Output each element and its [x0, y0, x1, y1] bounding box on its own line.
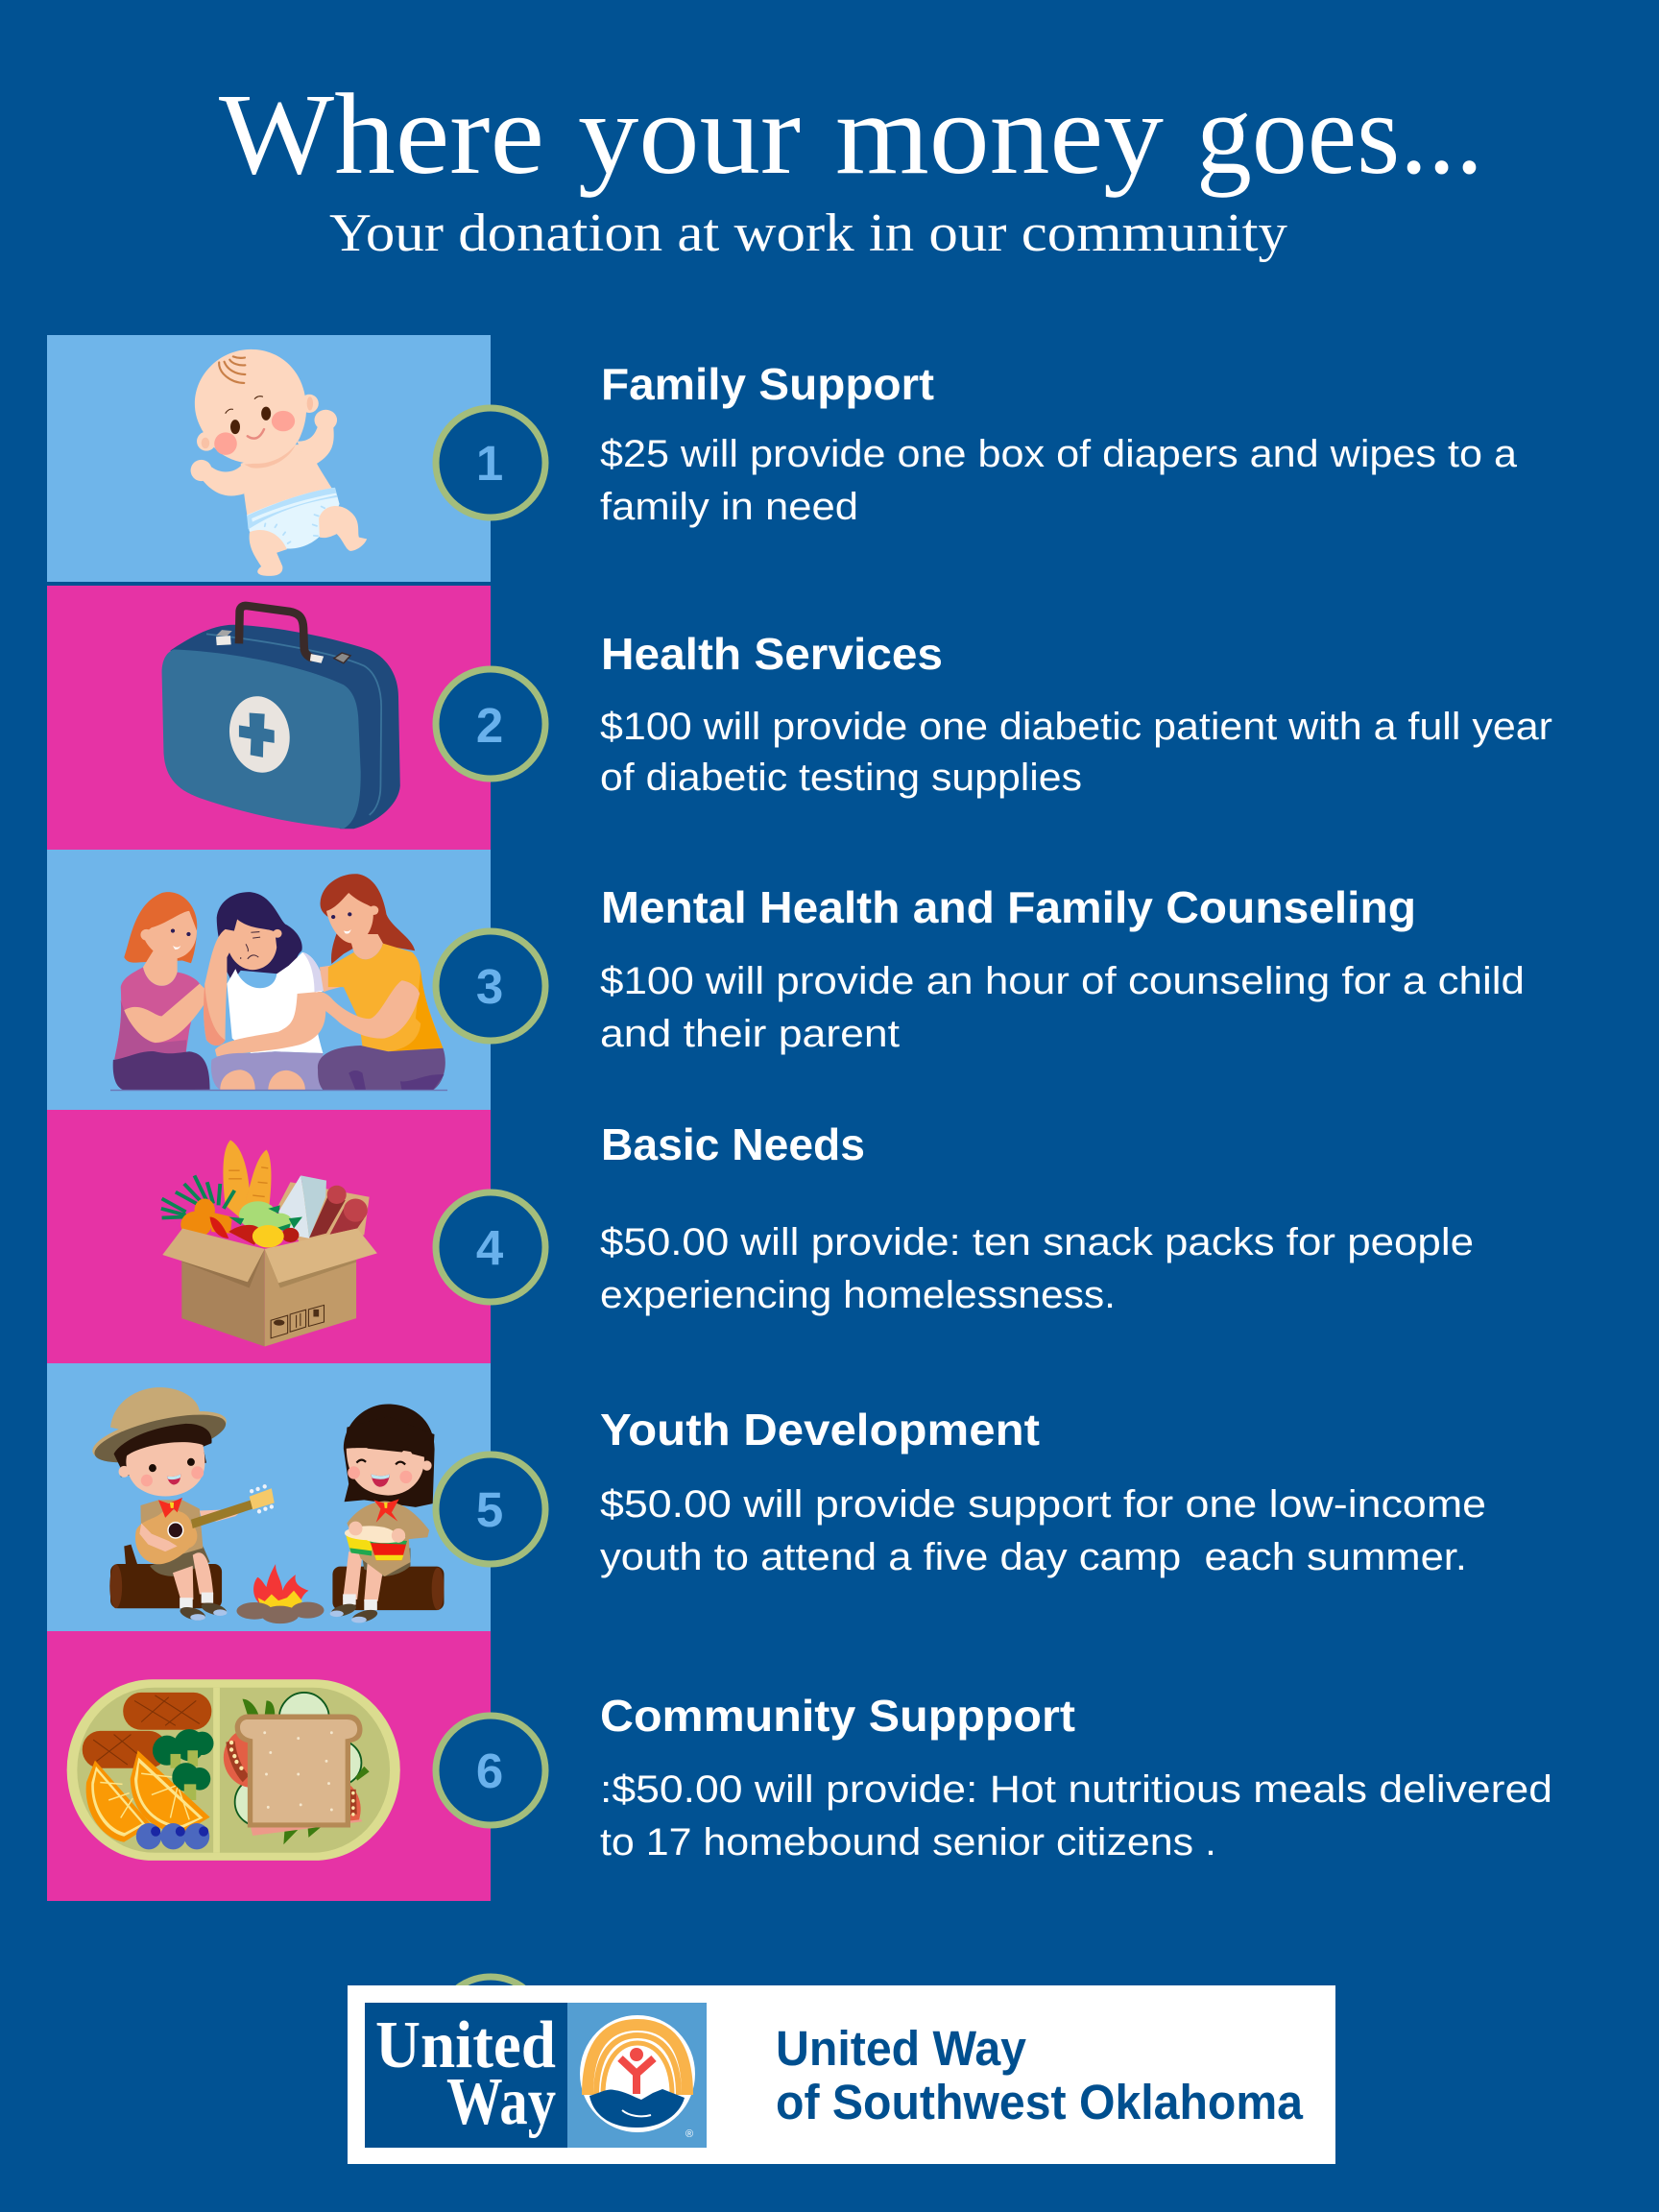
text block: mental health and family counseling: and their parent — [600, 1013, 900, 1055]
organisation name: United Way — [776, 2021, 1027, 2076]
text block: youth development: Youth Development — [600, 1405, 1040, 1455]
text block: health services: of diabetic testing supplies — [600, 757, 1082, 799]
panel: family support image — [47, 335, 491, 582]
number badge 3: 3 — [476, 959, 503, 1014]
number badge 6: 6 — [476, 1743, 503, 1798]
subtitle: Your donation at work in our community — [329, 204, 1287, 263]
number badge 4: 4 — [476, 1220, 504, 1275]
number badge 4 — [436, 1192, 545, 1302]
icon: baby — [191, 349, 367, 576]
number badge 2 — [436, 669, 545, 779]
text block: community support: Community Suppport — [600, 1691, 1075, 1741]
text block: family support: Family Support — [601, 359, 934, 409]
number badge 1: 1 — [476, 436, 503, 491]
panel: health services image — [47, 586, 491, 850]
icon: scouts at campfire — [88, 1387, 444, 1624]
title: Where — [219, 70, 544, 199]
text block: basic needs: experiencing homelessness. — [600, 1274, 1116, 1316]
logo square — [365, 2003, 707, 2148]
panel: counseling image — [47, 850, 491, 1110]
title — [219, 70, 1483, 199]
logo banner: United Way of Southwest Oklahoma — [348, 1985, 1335, 2164]
icon: first aid kit — [162, 606, 400, 829]
text block: youth development — [600, 1405, 1486, 1578]
title: your — [578, 70, 801, 199]
icon: lunch tray — [67, 1679, 400, 1861]
text block: basic needs: $50.00 will provide: ten snack packs for people — [600, 1221, 1474, 1263]
title: money — [835, 70, 1165, 199]
number badge 5 — [436, 1455, 545, 1564]
panel: community support image — [47, 1631, 491, 1901]
logo square: Way — [446, 2065, 556, 2139]
text block: mental health and family counseling: $100 will provide an hour of counseling for a child — [600, 960, 1525, 1002]
number badge 1 — [436, 408, 545, 517]
text block: health services — [600, 629, 1552, 799]
logo square: United — [375, 2008, 556, 2082]
organisation name: of Southwest Oklahoma — [776, 2075, 1304, 2129]
text block: family support: family in need — [600, 486, 858, 528]
text block: family support: $25 will provide one box of diapers and wipes to a — [600, 433, 1518, 475]
panel: basic needs image — [47, 1110, 491, 1363]
panel: youth development image — [47, 1363, 491, 1631]
organisation name — [776, 2021, 1304, 2129]
text block: health services: $100 will provide one diabetic patient with a full year — [600, 706, 1552, 748]
hidden badge behind logo — [436, 1977, 545, 2086]
title: goes... — [1196, 70, 1483, 199]
text block: health services: Health Services — [601, 629, 943, 679]
number badge 3 — [436, 931, 545, 1041]
text block: community support: to 17 homebound senior citizens . — [600, 1821, 1216, 1863]
text block: youth development: youth to attend a five day camp each summer. — [600, 1536, 1467, 1578]
number badge 5: 5 — [476, 1482, 503, 1537]
number badge 6 — [436, 1716, 545, 1825]
number badge 2: 2 — [476, 698, 503, 753]
text block: family support — [600, 359, 1518, 528]
text block: community support — [600, 1691, 1552, 1863]
icon: three women comforting — [110, 874, 447, 1091]
text block: basic needs — [600, 1119, 1474, 1316]
text block: mental health and family counseling: Mental Health and Family Counseling — [601, 882, 1416, 932]
logo square: ® — [685, 2128, 693, 2140]
text block: community support: :$50.00 will provide: Hot nutritious meals delivered — [600, 1768, 1552, 1811]
text block: mental health and family counseling — [600, 882, 1525, 1055]
icon: grocery box — [161, 1141, 377, 1346]
text block: youth development: $50.00 will provide support for one low-income — [600, 1483, 1486, 1526]
text block: basic needs: Basic Needs — [601, 1119, 865, 1169]
